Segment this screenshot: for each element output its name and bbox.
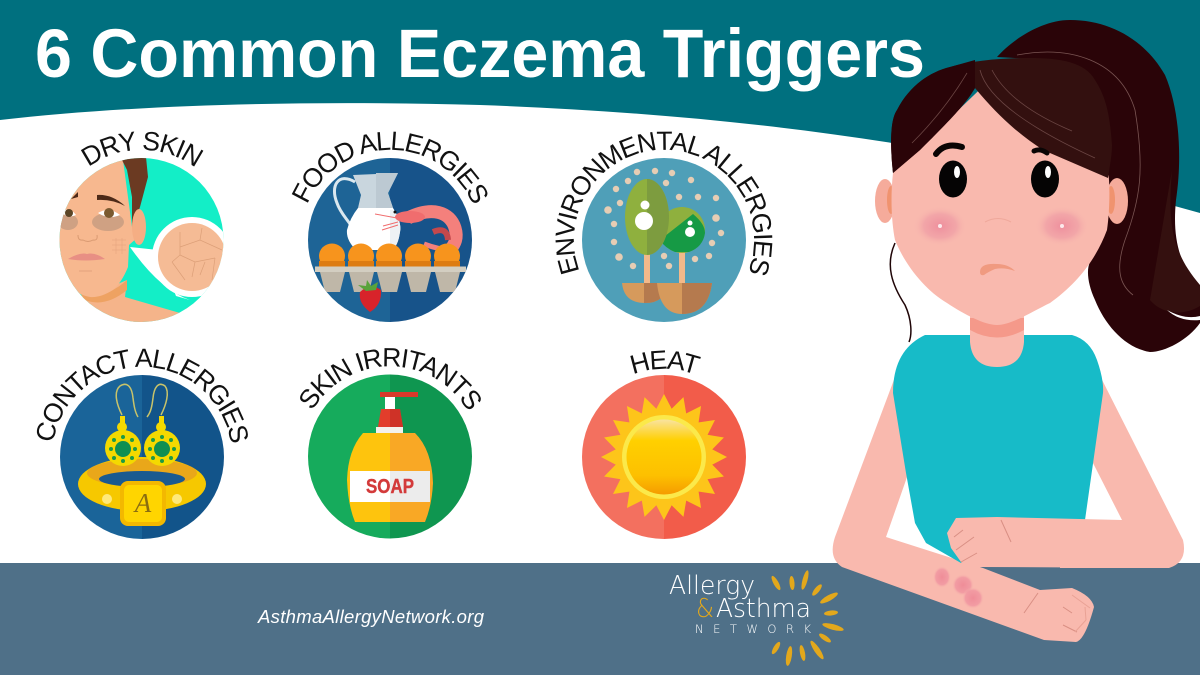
logo wordmark bbox=[669, 571, 811, 636]
heading: dry skin: DRY SKIN bbox=[80, 132, 204, 166]
footer band bbox=[0, 563, 1200, 675]
header band bbox=[0, 0, 1200, 213]
cheeks with rash bbox=[913, 206, 1089, 246]
title: 6 Common Eczema Triggers bbox=[35, 15, 925, 92]
icon: sun bbox=[582, 375, 746, 539]
logo wordmark: & bbox=[696, 594, 714, 624]
icon: soap bottle bbox=[308, 374, 472, 539]
panel: contact allergies bbox=[36, 348, 248, 539]
icon: trees and pollen bbox=[582, 158, 746, 322]
panel: food allergies bbox=[292, 132, 488, 322]
forearm and hand bbox=[947, 517, 1169, 568]
nose bbox=[985, 218, 1011, 222]
panel: dry skin bbox=[60, 132, 224, 322]
heading: heat: HEAT bbox=[630, 350, 701, 374]
left arm with rash bbox=[833, 353, 1094, 642]
ears bbox=[875, 178, 1128, 224]
logo: Allergy & Asthma Network bbox=[669, 570, 844, 666]
eyes and eyebrows bbox=[936, 146, 1059, 198]
logo sun rays bbox=[770, 570, 844, 666]
logo wordmark: NETWORK bbox=[695, 622, 811, 636]
panel: heat bbox=[582, 350, 746, 539]
icon: earrings and ring bbox=[60, 375, 224, 539]
front hair bbox=[891, 58, 1112, 178]
illustration: woman with eczema bbox=[833, 20, 1200, 642]
heading: contact allergies: CONTACT ALLERGIES bbox=[36, 348, 248, 442]
heading: skin irritants: SKIN IRRITANTS bbox=[300, 348, 481, 410]
stray hair strand bbox=[890, 243, 911, 342]
frowning mouth bbox=[980, 264, 1015, 275]
heading: environmental allergies: ENVIRONMENTAL ALLERGIES bbox=[556, 132, 772, 276]
icon: soap bottle: SOAP bbox=[366, 476, 414, 498]
shirt bbox=[893, 335, 1103, 563]
logo wordmark: Allergy bbox=[669, 571, 755, 601]
website url: AsthmaAllergyNetwork.org bbox=[257, 606, 485, 627]
icon: man's face with dry skin close-up bbox=[60, 158, 224, 322]
neck bbox=[970, 315, 1024, 367]
ponytail bbox=[997, 20, 1200, 352]
face bbox=[892, 70, 1109, 325]
panel: skin irritants bbox=[300, 348, 481, 538]
icon: milk jug, shrimp, eggs and strawberry bbox=[308, 158, 472, 322]
heading: food allergies: FOOD ALLERGIES bbox=[292, 132, 488, 203]
right upper arm bbox=[1060, 360, 1184, 568]
panel: environmental allergies bbox=[556, 132, 772, 322]
logo wordmark: Asthma bbox=[716, 594, 811, 624]
icon: earrings and ring: A bbox=[133, 488, 152, 518]
